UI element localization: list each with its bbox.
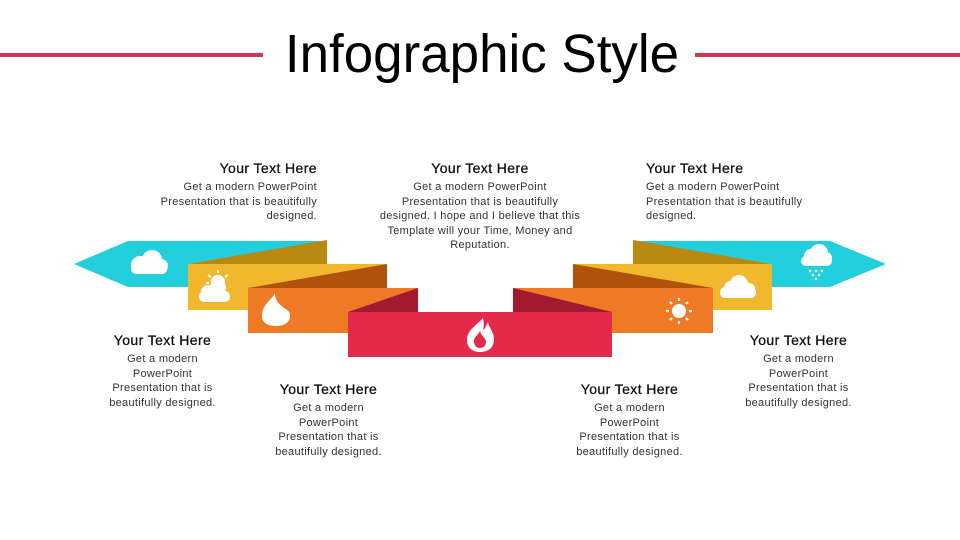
text: lower right: Presentation that is	[579, 431, 680, 443]
icon: flame drop	[262, 293, 290, 326]
ribbon: yellow right	[573, 264, 772, 310]
ribbon: orange left	[248, 288, 418, 333]
title line right	[695, 53, 960, 57]
text: top center: Presentation that is beautifully	[402, 196, 558, 208]
text: lower left: beautifully designed.	[275, 446, 382, 458]
title: Infographic Style	[285, 24, 679, 84]
text: left	[109, 332, 216, 408]
text: lower right: PowerPoint	[600, 416, 659, 428]
text: top left: Get a modern PowerPoint	[184, 181, 317, 193]
text: top center: Your Text Here	[431, 160, 529, 176]
text: top right: Get a modern PowerPoint	[646, 181, 779, 193]
icon: rain cloud	[801, 244, 832, 280]
text: top right: designed.	[646, 210, 696, 222]
text: left: PowerPoint	[133, 368, 192, 380]
text: top center: Template will your Time, Money and	[387, 224, 573, 236]
icon: fire	[467, 318, 494, 352]
ribbon: cyan right	[633, 240, 886, 287]
text: right	[745, 332, 852, 408]
text: right: Your Text Here	[750, 332, 847, 348]
text: left: beautifully designed.	[109, 396, 216, 408]
ribbon: red center	[348, 312, 612, 357]
text: top right: Presentation that is beautifully	[646, 196, 802, 208]
text: lower left: Your Text Here	[280, 381, 377, 397]
text: lower left: Presentation that is	[278, 431, 379, 443]
ribbon: orange right	[513, 288, 713, 333]
text: right: PowerPoint	[769, 368, 828, 380]
text: right: beautifully designed.	[745, 396, 852, 408]
title line left	[0, 53, 263, 57]
icon: sun	[666, 298, 692, 324]
text: lower left: Get a modern	[293, 402, 364, 414]
text: right: Get a modern	[763, 353, 834, 365]
icon: cloud	[131, 250, 168, 274]
icon: sun behind cloud	[199, 270, 230, 302]
text: lower left	[275, 381, 382, 458]
text: top center: designed. I hope and I believe that this	[380, 210, 580, 222]
text: left: Get a modern	[127, 353, 198, 365]
text: lower right	[576, 381, 683, 458]
text: top center: Get a modern PowerPoint	[413, 181, 547, 193]
text: left: Your Text Here	[114, 332, 211, 348]
text: top right: Your Text Here	[646, 160, 743, 176]
text: top right	[646, 160, 802, 222]
text: top left	[161, 160, 317, 222]
text: right: Presentation that is	[748, 382, 849, 394]
text: lower left: PowerPoint	[299, 416, 358, 428]
text: lower right: beautifully designed.	[576, 446, 683, 458]
text: top left: designed.	[267, 210, 317, 222]
text: lower right: Your Text Here	[581, 381, 678, 397]
icon: cloud right	[720, 275, 756, 298]
text: top center	[380, 160, 580, 251]
text: left: Presentation that is	[112, 382, 213, 394]
ribbon: yellow left	[188, 264, 387, 310]
text: top center: Reputation.	[450, 239, 510, 251]
text: lower right: Get a modern	[594, 402, 665, 414]
ribbon: cyan left	[74, 240, 327, 287]
text: top left: Presentation that is beautifully	[161, 196, 317, 208]
text: top left: Your Text Here	[220, 160, 317, 176]
